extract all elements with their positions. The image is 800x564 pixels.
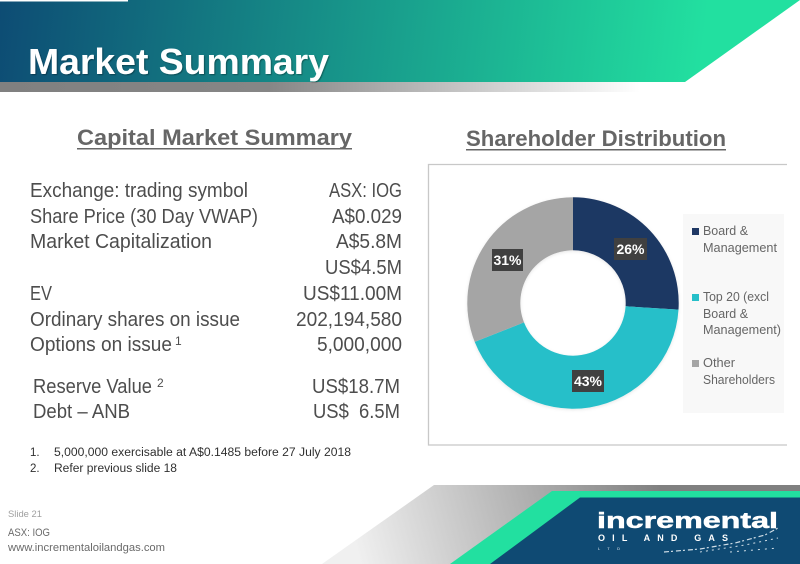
label: 43%: 43% — [574, 373, 603, 389]
logo: incremental — [597, 508, 778, 533]
row: reserve value: 2 — [157, 376, 164, 390]
footer text: ASX: IOG — [8, 527, 50, 539]
footnotes: 2. — [30, 463, 40, 475]
legend item: board and management: Board & — [703, 224, 749, 238]
label: 26% — [614, 238, 647, 260]
segment: other shareholders 31% — [467, 197, 573, 342]
footnotes: 1. — [30, 447, 40, 459]
legend item: other shareholders — [692, 356, 775, 387]
row: share price: A$0.029 — [332, 206, 402, 228]
logo — [597, 508, 778, 552]
heading: shareholder distribution: Shareholder Distribution — [466, 126, 726, 151]
row: options: 1 — [175, 334, 182, 348]
row: market capitalization: US$4.5M — [325, 257, 402, 279]
footer text — [7, 509, 165, 554]
row: share price — [30, 206, 402, 228]
row: share price: Share Price (30 Day VWAP) — [30, 206, 258, 228]
legend item: board and management — [692, 224, 778, 255]
row: market capitalization: Market Capitalization — [30, 231, 212, 253]
heading: capital market summary: Capital Market Summary — [77, 125, 353, 150]
segment: top 20 43% — [475, 306, 678, 409]
row: market capitalization — [30, 231, 402, 279]
panel: capital market table — [30, 180, 402, 423]
header banner — [0, 0, 800, 92]
row: options: Options on issue — [30, 334, 172, 356]
donut chart — [467, 197, 679, 409]
logo: OIL AND GAS — [598, 533, 728, 543]
row: ordinary shares — [30, 309, 402, 331]
legend item: top 20: Top 20 (excl — [703, 290, 769, 304]
row: reserve value: US$18.7M — [312, 376, 400, 398]
legend item: other shareholders: Shareholders — [703, 373, 775, 387]
panel: shareholder chart frame — [428, 164, 787, 445]
row: EV — [30, 283, 402, 305]
legend item: other shareholders: Other — [703, 356, 735, 370]
row: EV: EV — [30, 283, 53, 305]
label: 31%: 31% — [493, 252, 522, 268]
legend — [683, 214, 784, 413]
row: exchange: ASX: IOG — [329, 180, 402, 202]
label: 26%: 26% — [616, 241, 645, 257]
row: options: 5,000,000 — [317, 334, 402, 356]
segment: board and management 26% — [573, 197, 679, 310]
row: options — [30, 334, 402, 356]
row: debt: Debt – ANB — [33, 401, 130, 423]
row: market capitalization: A$5.8M — [336, 231, 402, 253]
row: debt — [33, 401, 400, 423]
footnotes: 5,000,000 exercisable at A$0.1485 before 27 July 2018 — [54, 447, 351, 459]
row: ordinary shares: Ordinary shares on issue — [30, 309, 240, 331]
legend item: board and management: Management — [703, 241, 778, 255]
footnotes — [30, 447, 351, 475]
row: debt: US$ 6.5M — [313, 401, 400, 423]
footnotes: Refer previous slide 18 — [54, 463, 177, 475]
footer text: Slide 21 — [8, 509, 42, 519]
legend item: top 20 — [692, 290, 781, 337]
label: 43% — [572, 370, 604, 392]
row: ordinary shares: 202,194,580 — [296, 309, 402, 331]
row: exchange — [30, 180, 402, 202]
label: 31% — [492, 249, 523, 271]
legend item: top 20: Board & — [703, 307, 749, 321]
row: reserve value — [33, 376, 400, 398]
row: exchange: Exchange: trading symbol — [30, 180, 248, 202]
footer shapes — [322, 485, 800, 564]
footer text: www.incrementaloilandgas.com — [7, 542, 165, 554]
row: EV: US$11.00M — [303, 283, 402, 305]
row: reserve value: Reserve Value — [33, 376, 152, 398]
logo: LTD — [598, 546, 620, 551]
legend item: top 20: Management) — [703, 323, 781, 337]
title: Market Summary — [28, 41, 329, 82]
